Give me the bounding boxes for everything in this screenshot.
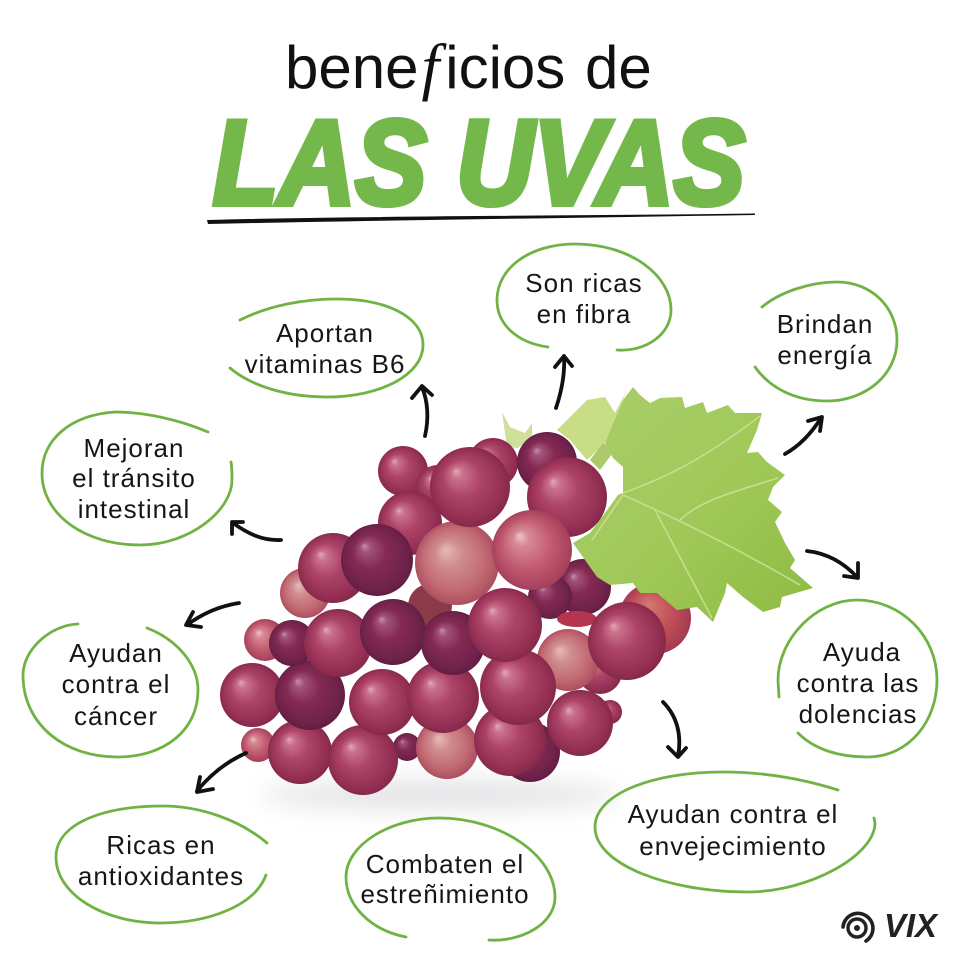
grape shadow (260, 781, 620, 809)
arrow: to Ricas (197, 753, 246, 792)
arrow: to Ayuda dolencias (807, 551, 858, 578)
bubble: Son ricas en fibra: en fibra (537, 299, 631, 329)
bubble: Mejoran el tránsito intestinal: el tránsito (72, 463, 196, 493)
bubble: Brindan energía: Brindan (777, 309, 873, 339)
bubble: Ricas en antioxidantes: antioxidantes (78, 861, 244, 891)
arrow: to Mejoran (232, 522, 281, 540)
title: beneficios de: de (585, 34, 652, 101)
bubble: Aportan vitaminas B6: Aportan (276, 318, 374, 348)
bubble: Brindan energía: energía (777, 340, 873, 370)
bubble: Son ricas en fibra: Son ricas (525, 268, 643, 298)
grapes (220, 432, 666, 795)
arrow: to Aportan (412, 386, 432, 436)
bubble: Ayudan contra el cáncer: Ayudan (69, 638, 163, 668)
bubble: Combaten el estreñimiento (346, 818, 555, 940)
bubble: Son ricas en fibra (497, 244, 671, 350)
illustration: grape bunch with leaf (220, 387, 813, 809)
logo: VIX: VIX (884, 907, 939, 944)
arrow: to Brindan (785, 417, 822, 454)
bubble: Ricas en antioxidantes (56, 806, 267, 923)
bubble: Mejoran el tránsito intestinal (42, 412, 232, 545)
bubble: Ayuda contra las dolencias: dolencias (799, 699, 917, 729)
arrow: to envejecimiento (663, 702, 686, 757)
bubble: Aportan vitaminas B6 (230, 299, 423, 397)
bubble: Aportan vitaminas B6: vitaminas B6 (245, 349, 405, 379)
small back leaves (502, 390, 627, 470)
vine leaf (573, 387, 813, 622)
bubble: Ayudan contra el cáncer: cáncer (74, 701, 158, 731)
bubble: Ayudan contra el envejecimiento: Ayudan contra el (628, 799, 838, 829)
bubble: Mejoran el tránsito intestinal: Mejoran (84, 433, 184, 463)
bubble: Brindan energía (755, 282, 897, 401)
arrow: to Ayudan cancer (186, 603, 239, 627)
title: LAS UVAS: LAS UVAS (213, 96, 745, 230)
bubble: Combaten el estreñimiento: estreñimiento (360, 879, 530, 909)
bubble: Ayuda contra las dolencias: Ayuda (823, 637, 901, 667)
arrow: to Son ricas (555, 356, 572, 408)
bubble: Ricas en antioxidantes: Ricas en (106, 830, 216, 860)
bubble: Ayudan contra el envejecimiento: envejecimiento (639, 831, 827, 861)
bubble: Ayudan contra el cáncer (23, 624, 198, 757)
title: beneficios de: beneficios (285, 31, 565, 102)
bubble: Mejoran el tránsito intestinal: intestinal (78, 494, 190, 524)
logo: VIX (843, 907, 939, 944)
bubble: Combaten el estreñimiento: Combaten el (366, 849, 524, 879)
title underline (207, 214, 755, 224)
bubble: Ayuda contra las dolencias (778, 600, 937, 757)
bubble: Ayuda contra las dolencias: contra las (797, 668, 919, 698)
bubble: Ayudan contra el cáncer: contra el (62, 669, 170, 699)
bubble: Ayudan contra el envejecimiento (595, 772, 875, 892)
back grapes (528, 559, 691, 654)
